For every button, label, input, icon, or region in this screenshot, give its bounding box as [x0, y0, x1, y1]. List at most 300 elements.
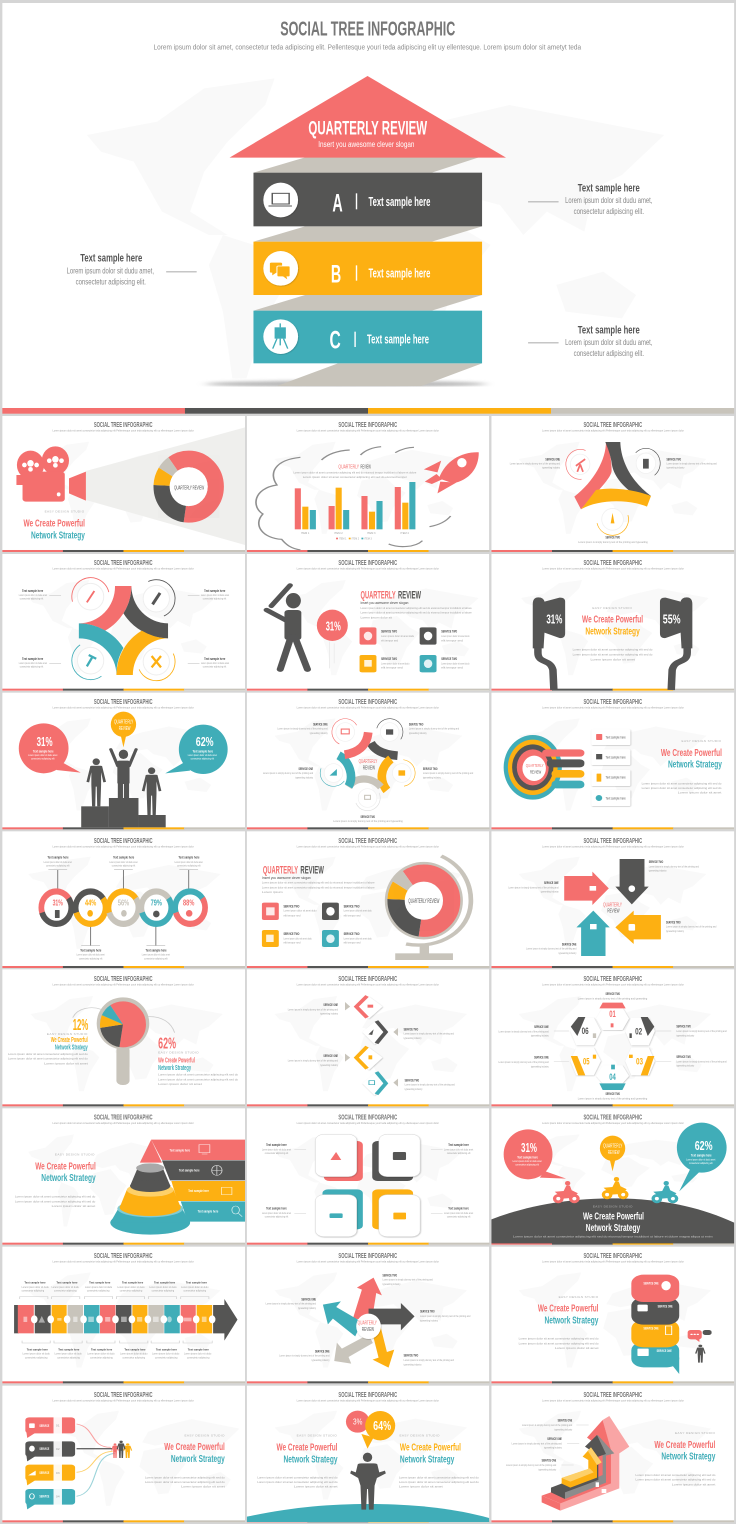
- service tiles: elit tempor sed: [441, 639, 463, 642]
- centre label: REVIEW: [363, 765, 375, 771]
- panel: slide 10 linked rings: [2, 831, 245, 968]
- service labels: SERVICE TWO: [423, 767, 437, 771]
- text block: [636, 1432, 715, 1486]
- service labels: typesetting industry: [295, 776, 313, 779]
- lower labels: Lorem ipsum dolor sit dudu: [120, 1352, 147, 1355]
- speech stack: SERVICE ONE: [658, 1304, 673, 1308]
- panel: slide 2 cloud bar chart: [247, 416, 490, 552]
- panel: slide 15 hexagons: SOCIAL TREE INFOGRAPHIC: [583, 974, 642, 983]
- text block: Lorem ipsum dolor sit amet consectetur adipiscing elit sed do: [15, 1195, 95, 1198]
- upper labels: Lorem ipsum dolor sit dudu: [149, 1286, 176, 1289]
- text: service two right: typesetting industry: [667, 466, 684, 469]
- panel: slide 21 speech stack: SOCIAL TREE INFOGRAPHIC: [583, 1251, 642, 1260]
- labels: Text sample here: [204, 657, 226, 661]
- globe donut chart: QUARTERLY REVIEW: [408, 897, 439, 905]
- text block: We Create Powerful: [582, 614, 643, 625]
- text block right: 62%: We Create Powerful: [158, 1056, 195, 1064]
- service labels: SERVICE TWO: [409, 722, 423, 726]
- panel: slide 8 five arcs: [247, 693, 490, 829]
- bar chart: ITEM 1: [339, 537, 346, 540]
- service labels: typesetting industry: [559, 952, 577, 955]
- person: [350, 1453, 386, 1510]
- service labels: SERVICE ONE: [315, 1349, 330, 1353]
- icon: rocket: [424, 452, 479, 493]
- text block: EASY DESIGN STUDIO: [682, 740, 721, 743]
- heading: REVIEW: [300, 864, 324, 876]
- service labels: [263, 722, 473, 823]
- heading: Lorem ipsum dolor sit: [360, 616, 392, 619]
- balloon: quarterly review: QUARTERLY: [114, 720, 133, 725]
- ring labels: Lorem ipsum dolor sit dudu amet: [77, 953, 105, 956]
- speech stack: SERVICE ONE: [644, 1281, 659, 1285]
- balloon: 62%: [165, 725, 228, 774]
- callout: left: Lorem ipsum dolor sit dudu amet,: [67, 267, 154, 276]
- callout: right bottom: Text sample here: [578, 324, 640, 336]
- service labels: SERVICE TWO: [420, 1309, 435, 1313]
- text: service two right: SERVICE TWO: [667, 457, 681, 461]
- balloon: 62%: 62%: [196, 735, 214, 749]
- heading: Lorem ipsum dolor sit amet consectetur adipiscing elit sed do eiusmod tempor incididunt ut labore: [360, 611, 472, 614]
- service labels: SERVICE ONE: [542, 1458, 556, 1462]
- service labels: [508, 860, 716, 955]
- bar B: [253, 242, 482, 295]
- panel: slide 16 cone pyramid: Lorem ipsum dolor sit amet consectetur teda adipiscing elit Pellentesque youri teda adipiscing elit uy ellentesque Lorem ipsum dolor: [53, 1122, 195, 1125]
- petal ribbons: [79, 586, 168, 675]
- isometric layered arrows: [542, 1416, 629, 1511]
- upper labels: Text sample here: [24, 1281, 46, 1284]
- bar B: Text sample here: [368, 267, 431, 281]
- lower labels: Text sample here: [58, 1348, 79, 1351]
- heading: [262, 864, 375, 894]
- panel: slide 3 triangle ribbon: SOCIAL TREE INFOGRAPHIC: [583, 420, 642, 429]
- text block left: 12%: Lorem ipsum dolor sit amet consectetur adipiscing elit sed do: [8, 1053, 88, 1056]
- panel: main quarterly review slide: SOCIAL TREE INFOGRAPHIC: [280, 18, 455, 40]
- panel: slide 17 four rounded squares: Lorem ipsum dolor sit dudu amet: [444, 1148, 473, 1151]
- balloon: 31%: Lorem ipsum dolor sit dudu amet: [28, 754, 57, 757]
- service labels: typesetting industry: [320, 1012, 338, 1015]
- bars: Text sample here: [169, 1148, 190, 1152]
- triangle ribbon: [574, 442, 651, 509]
- callout: left: Text sample here: [80, 252, 142, 264]
- linked rings: 88%: [183, 899, 194, 908]
- panel: slide 23 person on teal hill: SOCIAL TREE INFOGRAPHIC: [338, 1390, 397, 1399]
- panel: slide 11 globe donut: SOCIAL TREE INFOGRAPHIC: [338, 836, 397, 845]
- panel: slide 13 magnifier pie: [2, 969, 245, 1106]
- hexagon ring: [570, 1003, 655, 1090]
- panel: slide 20 five radial arrows: QUARTERLY: [358, 1321, 377, 1326]
- ring labels: Lorem ipsum dolor sit dudu amet: [44, 861, 72, 864]
- panel: slide 14 chevron diamonds: [247, 969, 490, 1106]
- upper labels: Lorem ipsum dolor sit dudu: [85, 1286, 112, 1289]
- hexagon ring: 04: [609, 1073, 616, 1082]
- panel: slide 1 film camera donut: We Create Powerful: [23, 518, 85, 529]
- panel: slide 5 batter figure: [247, 554, 490, 691]
- bar chart: ITEM 3: [367, 532, 376, 535]
- heading: Lorem ipsum dolor sit amet consectetur adipiscing elit sed do eiusmod tempor incididunt ut labore: [262, 886, 375, 889]
- service labels: SERVICE ONE: [558, 1418, 572, 1422]
- balloon: 62%: [677, 1123, 727, 1191]
- service labels: Lorem ipsum is simply dummy text of the printing and: [288, 1059, 338, 1062]
- text block: Network Strategy: [585, 625, 640, 637]
- linked rings: [41, 891, 205, 924]
- chevron items: [356, 996, 386, 1095]
- service labels: SERVICE ONE: [301, 1297, 316, 1301]
- panel: slide 23 person on teal hill: Network Strategy: [284, 1453, 337, 1465]
- service labels: SERVICE ONE: [323, 1003, 338, 1007]
- upper labels: consectetur adipiscing: [184, 1289, 206, 1292]
- upper labels: Text sample here: [89, 1281, 110, 1284]
- panel: slide 22 speech tabs: We Create Powerful: [164, 1441, 225, 1452]
- centre label: [358, 1321, 377, 1333]
- centre label: [359, 759, 377, 771]
- concentric rings with bars: REVIEW: [530, 770, 541, 775]
- icon ring: pen: [67, 572, 115, 621]
- panel: slide 23 person on teal hill: We Create Powerful: [276, 1442, 337, 1453]
- service tiles: SERVICE TWO: [381, 629, 397, 633]
- bars: [151, 1140, 245, 1222]
- lower labels: Lorem ipsum dolor sit dudu: [152, 1352, 179, 1355]
- callout: right bottom: Lorem ipsum dolor sit dudu amet,: [565, 338, 652, 347]
- text block: Lorem ipsum dolor sit amet: [52, 1205, 95, 1208]
- ring labels: Text sample here: [113, 855, 135, 859]
- arrow: up teal: [576, 911, 610, 956]
- service tiles: [262, 903, 372, 947]
- text block right: 62%: Lorem ipsum dolor sit amet: [158, 1083, 202, 1086]
- service tiles: SERVICE TWO: [284, 904, 299, 908]
- balloon: quarterly review: REVIEW: [608, 1150, 620, 1156]
- callout: right bottom: [528, 324, 652, 358]
- hill with text: [491, 1198, 734, 1243]
- side labels: Text sample here: [448, 1206, 469, 1210]
- text block: Lorem ipsum dolor sit amet consectetur adipiscing elit sed do: [519, 1337, 598, 1340]
- ring labels: consectetur adipiscing elit: [177, 864, 200, 867]
- lower labels: Lorem ipsum dolor sit dudu: [54, 1352, 82, 1355]
- panel: slide 20 five radial arrows: [247, 1247, 490, 1383]
- chart heading: Lorem ipsum dolor sit amet consectetur adipiscing elit sed do eiusmod tempor: [303, 476, 408, 479]
- upper labels: Lorem ipsum dolor sit dudu: [22, 1286, 49, 1289]
- labels: Text sample here: [22, 589, 44, 593]
- callout: right top: consectetur adipiscing elit.: [574, 207, 644, 216]
- panel: slide 16 cone pyramid: Network Strategy: [41, 1172, 96, 1183]
- panel: slide 19 puzzle arrow timeline: [2, 1247, 245, 1383]
- service labels: SERVICE TWO: [405, 1078, 419, 1082]
- labels: consectetur adipiscing elit: [20, 597, 43, 600]
- podium: [81, 798, 166, 827]
- panel: slide 16 cone pyramid: SOCIAL TREE INFOGRAPHIC: [94, 1113, 153, 1121]
- text: service two bottom: Lorem ipsum is simply dummy text of the printing and typesetting: [578, 541, 648, 544]
- service labels: [506, 1418, 589, 1471]
- side labels: consectetur adipiscing elit: [265, 1215, 288, 1218]
- linked rings: 56%: [118, 899, 129, 908]
- service tiles: elit tempor sed: [381, 666, 403, 669]
- panel: slide 22 speech tabs: Lorem ipsum dolor sit amet consectetur teda adipiscing elit Pellentesque youri teda adipiscing elit uy ellentesque Lorem ipsum dolor: [53, 1399, 195, 1402]
- bar chart: [295, 482, 415, 540]
- riders: [553, 1177, 678, 1203]
- panel: slide 11 globe donut: Lorem ipsum dolor sit amet dudu: [344, 909, 372, 912]
- arrow timeline blocks: [14, 1299, 238, 1341]
- panel: slide 7 podium: SOCIAL TREE INFOGRAPHIC: [94, 697, 153, 706]
- text block: Lorem ipsum dolor sit amet: [590, 658, 635, 661]
- service labels: typesetting industry: [320, 1064, 338, 1067]
- text block: Lorem ipsum dolor sit amet consectetur adipiscing elit sed do: [145, 1481, 225, 1484]
- panel: slide 17 four rounded squares: Lorem ipsum dolor sit amet consectetur teda adipiscing elit Pellentesque youri teda adipiscing elit uy ellentesque Lorem ipsum dolor: [297, 1122, 440, 1125]
- icon rings: [316, 713, 421, 813]
- ring labels: consectetur adipiscing elit: [46, 864, 69, 867]
- labels: [19, 589, 229, 668]
- text block right: 62%: EASY DESIGN STUDIO: [158, 1051, 199, 1054]
- upper labels: Lorem ipsum dolor sit dudu: [52, 1286, 79, 1289]
- tile: yellow: [372, 1189, 420, 1237]
- cards: Text sample here: [606, 796, 626, 800]
- arrow: down dark: [615, 859, 649, 904]
- ring labels: consectetur adipiscing elit: [144, 957, 168, 960]
- arrow: right red: [564, 872, 609, 905]
- balloon: 62%: Lorem ipsum dolor sit dudu amet: [188, 754, 217, 757]
- lower labels: consectetur adipiscing: [57, 1356, 80, 1359]
- service labels: Lorem ipsum is simply dummy text of the printing and typesetting: [578, 1097, 647, 1100]
- lower labels: consectetur adipiscing: [187, 1356, 209, 1359]
- service labels: Lorem ipsum is simply dummy text of the printing and: [423, 772, 473, 775]
- upper labels: [20, 1281, 209, 1299]
- panel: slide 24 isometric arrows: [491, 1386, 734, 1522]
- ring labels: Text sample here: [80, 948, 102, 952]
- service labels: Lorem ipsum is simply dummy text of the printing and: [405, 1083, 455, 1086]
- speech stack: SERVICE ONE: [644, 1326, 659, 1330]
- panel: slide 20 five radial arrows: SOCIAL TREE INFOGRAPHIC: [338, 1251, 397, 1260]
- panel: slide 19 puzzle arrow timeline: SOCIAL TREE INFOGRAPHIC: [94, 1251, 153, 1260]
- earbud right: 55%: [663, 612, 681, 627]
- hexagon ring: 03: [636, 1057, 643, 1067]
- panel: slide 4 four petal diagram: SOCIAL TREE INFOGRAPHIC: [94, 558, 153, 567]
- hill with text: We Create Powerful: [583, 1210, 644, 1222]
- service tiles: elit tempor sed: [344, 941, 360, 944]
- bar chart: ITEM 2: [352, 537, 359, 540]
- service labels: SERVICE TWO: [404, 1353, 418, 1357]
- side labels: consectetur adipiscing elit: [265, 1152, 288, 1155]
- panel: slide 23 person on teal hill: [247, 1386, 490, 1522]
- panel: slide 4 four petal diagram: Lorem ipsum dolor sit dudu amet: [201, 662, 229, 665]
- service labels: Lorem ipsum is simply dummy text of the printing and: [266, 1302, 316, 1305]
- speech tabs: SERVICE: [39, 1471, 49, 1475]
- service tiles: SERVICE TWO: [284, 932, 299, 936]
- chart heading: [293, 465, 416, 479]
- ring labels: Text sample here: [47, 855, 69, 859]
- projector beam: [86, 427, 245, 545]
- balloon: 31%: [317, 610, 348, 668]
- service labels: Lorem ipsum is simply dummy text of the printing and: [288, 1008, 338, 1011]
- colour strip: [2, 408, 734, 414]
- balloon: 62%: 62%: [695, 1139, 713, 1153]
- service labels: typesetting industry: [531, 1065, 549, 1068]
- upper labels: Text sample here: [122, 1281, 143, 1284]
- cards: Text sample here: [606, 735, 626, 739]
- service tiles: elit tempor sed: [284, 941, 300, 944]
- heading: Lorem ipsum: [262, 891, 283, 894]
- lower labels: consectetur adipiscing: [90, 1356, 113, 1359]
- service labels: SERVICE TWO: [383, 1273, 397, 1277]
- speech tabs: 01: [56, 1424, 60, 1427]
- panel: slide 1 film camera donut: [2, 416, 245, 552]
- bar chart: ITEM 4: [400, 532, 409, 535]
- callout: right top: Text sample here: [578, 182, 640, 194]
- service labels: SERVICE TWO: [606, 992, 620, 996]
- service tiles: elit tempor sed: [284, 914, 300, 917]
- panel: slide 21 speech stack: Network Strategy: [544, 1314, 598, 1326]
- ring labels: Text sample here: [178, 855, 200, 859]
- service tiles: [360, 627, 469, 672]
- panel: slide 19 puzzle arrow timeline: Lorem ipsum dolor sit amet consectetur teda adipiscing elit Pellentesque youri teda adipiscing elit uy ellentesque Lorem ipsum dolor: [53, 1260, 195, 1263]
- balloon: 62%: consectetur adipiscing elit: [191, 757, 214, 760]
- panel: slide 11 globe donut: [247, 831, 490, 968]
- text block left: Lorem ipsum dolor sit amet consectetur adipiscing elit sed do: [257, 1476, 337, 1479]
- panel: slide 12 four arrows: QUARTERLY: [603, 902, 622, 908]
- upper labels: Text sample here: [154, 1281, 175, 1284]
- bar A: A: [332, 189, 343, 217]
- callout: right top: Lorem ipsum dolor sit dudu amet,: [565, 196, 652, 205]
- service labels: typesetting industry: [649, 869, 667, 872]
- linked rings: 79%: [151, 899, 162, 908]
- text block: EASY DESIGN STUDIO: [592, 607, 632, 610]
- speech tabs: SERVICE: [39, 1447, 49, 1451]
- icon ring: pencil: [592, 499, 633, 540]
- callout: right top: [528, 182, 652, 216]
- panel: slide 17 four rounded squares: [247, 1108, 490, 1245]
- balloon: 62%: consectetur adipiscing elit: [689, 1162, 713, 1165]
- connector lines: [48, 870, 198, 946]
- labels: Lorem ipsum dolor sit dudu amet: [19, 662, 47, 665]
- balloon: 31%: consectetur adipiscing elit: [515, 1163, 539, 1166]
- side labels: consectetur adipiscing elit: [447, 1152, 470, 1155]
- tile: red: [315, 1134, 363, 1181]
- text block: Lorem ipsum dolor sit amet consectetur adipiscing elit sed do: [573, 648, 652, 651]
- service labels: Lorem ipsum is simply dummy text of the printing and: [279, 1354, 330, 1357]
- text block left: EASY DESIGN STUDIO: [297, 1434, 337, 1437]
- text: service two right: [667, 457, 717, 469]
- panel: slide 23 person on teal hill: Lorem ipsum dolor sit amet consectetur teda adipiscing elit Pellentesque youri teda adipiscing elit uy ellentesque Lorem ipsum dolor: [297, 1399, 440, 1402]
- upper labels: consectetur adipiscing: [152, 1289, 174, 1292]
- text block right: Lorem ipsum dolor sit amet consectetur adipiscing elit sed do: [399, 1476, 479, 1479]
- service labels: SERVICE ONE: [313, 722, 328, 726]
- text block right: Lorem ipsum dolor sit amet consectetur adipiscing elit sed do: [399, 1481, 479, 1484]
- hill with text: Network Strategy: [586, 1222, 640, 1233]
- service labels: typesetting industry: [538, 1468, 556, 1471]
- side labels: Text sample here: [266, 1143, 287, 1147]
- service labels: typesetting industry: [676, 1064, 694, 1067]
- bar chart: ITEM 2: [334, 532, 343, 535]
- labels: consectetur adipiscing elit: [20, 665, 43, 668]
- icon ring: wrench: [135, 577, 178, 621]
- service labels: SERVICE TWO: [404, 1027, 418, 1031]
- service labels: [266, 1273, 470, 1366]
- text block right: [399, 1434, 479, 1488]
- bubbles: 3%: [353, 1417, 363, 1427]
- arc ribbons: [339, 732, 398, 790]
- service labels: typesetting industry: [541, 890, 559, 893]
- panel: slide 22 speech tabs: Network Strategy: [171, 1453, 225, 1464]
- service labels: Lorem ipsum is simply dummy text of the printing and: [404, 1032, 454, 1035]
- chart heading: Lorem ipsum dolor sit amet consectetur adipiscing elit sed do eiusmod tempor incididunt ut labore et dolore: [293, 471, 416, 474]
- panel: slide 3 triangle ribbon: [491, 416, 734, 552]
- service labels: typesetting industry: [423, 776, 441, 779]
- roof triangle with heading: Insert you awesome clever slogan: [318, 140, 414, 149]
- text block: [23, 510, 85, 541]
- text block: Lorem ipsum dolor sit amet: [555, 1347, 598, 1350]
- hexagon ring: 01: [609, 1010, 616, 1019]
- panel: slide 12 four arrows: [491, 831, 734, 968]
- figure with speech bubbles: [688, 1330, 712, 1363]
- service tiles: elit tempor sed: [441, 666, 463, 669]
- panel: slide 20 five radial arrows: Lorem ipsum dolor sit amet consectetur teda adipiscing elit Pellentesque youri teda adipiscing elit uy ellentesque Lorem ipsum dolor: [297, 1260, 440, 1263]
- panel: slide 3 triangle ribbon: SERVICE ONE: [545, 457, 560, 461]
- beige connector bands: [253, 157, 482, 386]
- lower labels: Text sample here: [27, 1348, 48, 1351]
- text block right: 62%: Network Strategy: [158, 1063, 191, 1072]
- radial arrows: [323, 1278, 415, 1368]
- text: service one: Lorem ipsum is simply dummy text of the printing and: [510, 462, 560, 465]
- service labels: Lorem ipsum is simply dummy text of the printing and: [420, 1315, 470, 1318]
- panel: slide 15 hexagons: [491, 969, 734, 1106]
- balloon: 62%: Text sample here: [192, 749, 213, 753]
- service tiles: SERVICE TWO: [344, 904, 360, 908]
- panel: slide 1 film camera donut: QUARTERLY REVIEW: [174, 486, 204, 491]
- ring labels: consectetur adipiscing elit: [112, 864, 135, 867]
- callout: left: [67, 252, 197, 287]
- panel: slide 10 linked rings: Lorem ipsum dolor sit dudu amet: [175, 861, 203, 864]
- text block right: EASY DESIGN STUDIO: [399, 1434, 440, 1437]
- service labels: SERVICE ONE: [547, 1437, 562, 1441]
- cards: Text sample here: [606, 775, 626, 779]
- donut chart: [162, 459, 216, 514]
- speech tabs: SERVICE: [39, 1494, 49, 1498]
- text block: EASY DESIGN STUDIO: [45, 510, 84, 513]
- panel: slide 11 globe donut: Lorem ipsum dolor sit amet dudu: [344, 937, 372, 940]
- upper labels: Text sample here: [186, 1281, 207, 1284]
- side labels: Text sample here: [266, 1206, 287, 1210]
- linked rings: 44%: [85, 899, 96, 908]
- balloon: 31%: 31%: [37, 735, 53, 749]
- concentric rings with bars: [504, 735, 584, 800]
- service labels: Lorem ipsum is simply dummy text of the printing and typesetting: [578, 997, 647, 1000]
- panel: slide 1 film camera donut: Lorem ipsum dolor sit amet consectetur teda adipiscing elit Pellentesque youri teda adipiscing elit uy ellentesque Lorem ipsum dolor: [53, 429, 195, 432]
- lower labels: Lorem ipsum dolor sit dudu: [184, 1352, 211, 1355]
- ring labels: Lorem ipsum dolor sit dudu amet: [142, 953, 170, 956]
- side labels: consectetur adipiscing elit: [447, 1215, 470, 1218]
- service labels: Lorem ipsum is simply dummy text of the printing and: [506, 1464, 556, 1467]
- heading: Insert you awesome clever slogan: [360, 601, 408, 605]
- service labels: typesetting industry: [404, 1363, 422, 1366]
- lower labels: Text sample here: [188, 1348, 209, 1351]
- panel: slide 13 magnifier pie: SOCIAL TREE INFOGRAPHIC: [94, 974, 153, 983]
- hexagon ring: 06: [582, 1027, 589, 1036]
- icon: laptop: [268, 193, 292, 206]
- hill with text: EASY DESIGN STUDIO: [593, 1205, 633, 1208]
- balloon: 31%: [19, 723, 81, 773]
- speech tabs: 02: [56, 1448, 60, 1451]
- text block: [573, 607, 652, 661]
- service labels: Lorem ipsum is simply dummy text of the printing and: [498, 1061, 549, 1064]
- service tiles: SERVICE TWO: [441, 629, 457, 633]
- balloon: 31%: Lorem ipsum dolor sit dudu amet: [513, 1160, 542, 1163]
- panel: slide 18 riders on hill: [491, 1108, 734, 1245]
- balloon: 31%: Text sample here: [33, 749, 54, 753]
- balloon: 31%: 31%: [521, 1141, 537, 1155]
- labels: Lorem ipsum dolor sit dudu amet: [19, 594, 47, 597]
- service labels: [288, 1003, 455, 1091]
- text block: Lorem ipsum dolor sit amet consectetur adipiscing elit sed do: [519, 1342, 598, 1345]
- balloon: 62%: Text sample here: [691, 1153, 712, 1157]
- text block: [642, 740, 722, 794]
- text block: EASY DESIGN STUDIO: [184, 1434, 225, 1437]
